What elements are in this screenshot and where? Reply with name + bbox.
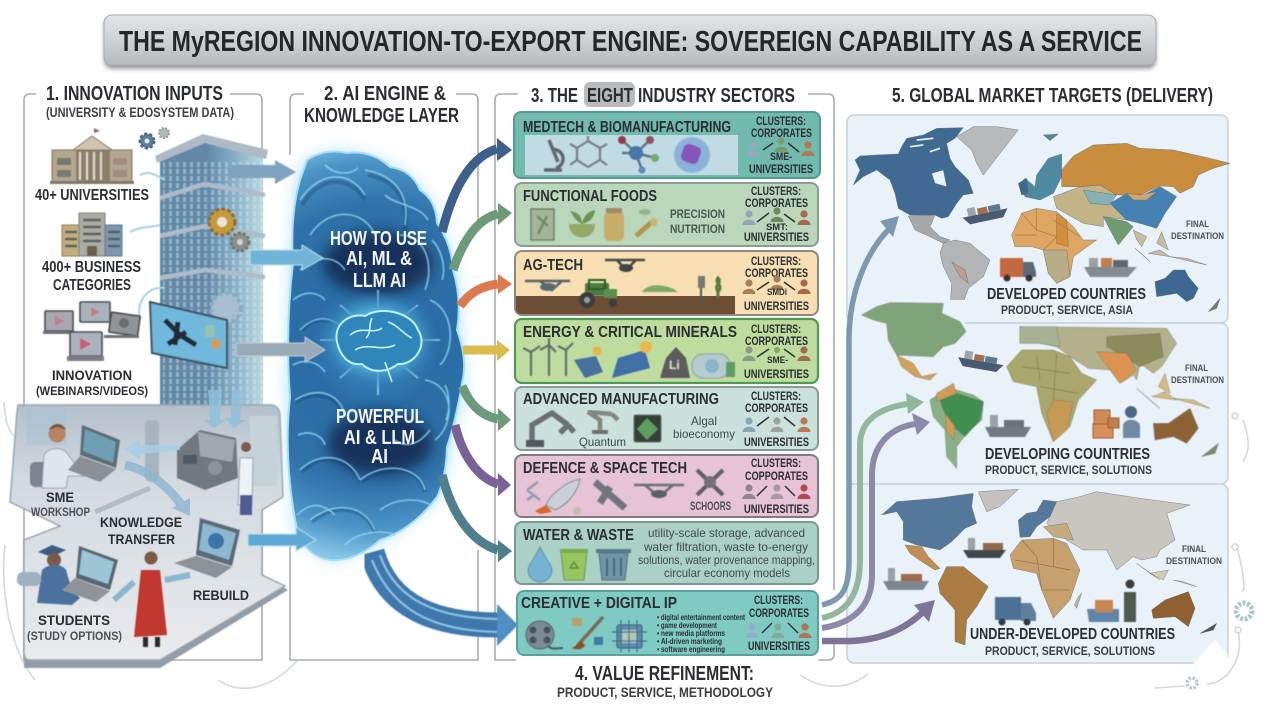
label: developed countries <box>987 286 1146 317</box>
sector card: defence and space tech <box>515 455 818 517</box>
label: rebuild: REBUILD <box>193 587 249 603</box>
cluster diagram: CORPORATES <box>745 196 808 210</box>
cluster diagram <box>746 593 812 653</box>
arrow to ag-tech <box>460 274 512 306</box>
label: value refinement: 4. VALUE REFINEMENT: <box>575 663 754 685</box>
icons: turbines, solar, lithium, tanker <box>523 338 735 378</box>
label: algal bioeconomy <box>673 414 735 441</box>
cluster diagram: SME- <box>770 151 792 163</box>
arrow to defence <box>455 425 511 496</box>
label: algal bioeconomy: bioeconomy <box>673 427 735 441</box>
icon: university building <box>50 128 134 184</box>
world map: under-developed <box>882 489 1217 645</box>
icon: gear right margin <box>1236 603 1252 619</box>
text: water solutions description: solutions, water provenance mapping, <box>638 553 815 567</box>
arrow to developing countries <box>822 393 924 618</box>
label: students study options: (STUDY OPTIONS) <box>27 629 122 643</box>
label: under-developed countries: PRODUCT, SERVICE, SOLUTIONS <box>985 644 1155 658</box>
title banner <box>104 15 1156 69</box>
icon: delivery truck <box>1000 258 1036 282</box>
cluster diagram: UNIVERSITIES <box>744 299 809 313</box>
label: final destination: DESTINATION <box>1166 556 1222 566</box>
platform shape <box>10 405 288 668</box>
decorative flow lines <box>4 402 1248 688</box>
icon: crates and worker <box>1087 580 1136 622</box>
panel: developed countries map <box>847 115 1230 323</box>
icon: rebuild laptop <box>174 518 240 578</box>
sector card: functional foods: FUNCTIONAL FOODS <box>523 188 657 205</box>
icons: microscope and molecules <box>544 136 710 174</box>
icon: lab machine and scientist <box>145 420 253 515</box>
cluster diagram: CORPORATES <box>751 126 812 140</box>
panel: innovation inputs <box>24 83 268 660</box>
label: developing countries: DEVELOPING COUNTRIES <box>985 446 1150 463</box>
sector card: medtech <box>514 112 820 178</box>
label: SME workshop <box>31 489 90 519</box>
icons: water drop, recycling bin, bin <box>528 547 631 582</box>
label: precision nutrition: NUTRITION <box>670 222 725 236</box>
icons: rocket, satellite, drones <box>527 470 723 515</box>
cluster diagram: CORPORATES <box>745 401 808 415</box>
sector card: defence and space tech: DEFENCE & SPACE TECH <box>523 460 687 477</box>
label: precision nutrition: PRECISION <box>670 207 725 221</box>
arrows: brain to sectors <box>372 138 518 646</box>
cluster diagram: CORPORATES <box>745 334 808 348</box>
brain label: how to use AI: AI, ML & <box>346 248 412 270</box>
cluster diagram: CORPORATES <box>745 266 808 280</box>
sector card: creative and digital IP <box>517 591 818 655</box>
label: 40+ universities: 40+ UNIVERSITIES <box>35 187 149 204</box>
heading: innovation inputs: 1. INNOVATION INPUTS <box>46 83 223 105</box>
text: water solutions description: water filtration, waste to-energy <box>643 540 808 554</box>
arrows: lab flow <box>95 390 246 516</box>
brain glow <box>290 153 462 560</box>
cluster diagram: CLUSTERS: <box>751 254 801 268</box>
cluster diagram: UNIVERSITIES <box>749 162 813 176</box>
label: under-developed countries: UNDER-DEVELOPED COUNTRIES <box>970 626 1175 643</box>
sector card: medtech: MEDTECH & BIOMANUFACTURING <box>523 119 731 136</box>
label: knowledge transfer <box>100 514 182 547</box>
cluster diagram: CLUSTERS: <box>751 456 801 470</box>
arrows: tower to brain <box>228 160 325 551</box>
label: final destination <box>1171 219 1224 241</box>
sector card: water and waste: WATER & WASTE <box>523 527 634 544</box>
label: precision nutrition <box>670 207 725 236</box>
cluster diagram: UNIVERSITIES <box>744 367 809 381</box>
cluster diagram: UNIVERSITIES <box>744 230 809 244</box>
icon: cargo ship <box>961 200 1009 226</box>
list: creative capabilities: • digital entertainment content <box>657 613 745 622</box>
arrow to developed countries <box>822 216 899 605</box>
arrows: export routes to markets <box>822 216 935 641</box>
cluster diagram <box>742 254 810 313</box>
label: knowledge transfer: TRANSFER <box>108 531 175 547</box>
dark text halos <box>323 231 433 475</box>
cluster diagram: SMT: <box>766 222 788 232</box>
label: final destination <box>1171 363 1224 385</box>
sector card: creative and digital IP: CREATIVE + DIGITAL IP <box>521 595 677 612</box>
sector card: energy and critical minerals: ENERGY & CRITICAL MINERALS <box>523 324 737 341</box>
icon: office building <box>62 213 122 256</box>
cluster diagram: SMDi <box>767 287 787 297</box>
icon: central glowing brain <box>316 290 440 390</box>
heading: AI engine: KNOWLEDGE LAYER <box>304 105 459 127</box>
arrow to energy <box>463 340 510 361</box>
cluster diagram: CORPORATES <box>749 606 809 620</box>
cluster diagram: CLUSTERS: <box>756 114 806 128</box>
brain: large blue brain <box>288 152 464 560</box>
sector card: ag-tech <box>515 251 818 315</box>
icon: caped figure <box>114 552 190 647</box>
label: developing countries: PRODUCT, SERVICE, SOLUTIONS <box>985 463 1152 477</box>
arrow to water <box>442 475 512 562</box>
icons: drones, tractor, sensor <box>525 260 720 308</box>
icons: robot arms and chip <box>526 412 661 447</box>
cluster diagram: CLUSTERS: <box>751 389 801 403</box>
label: final destination: FINAL <box>1185 363 1208 373</box>
label: 400+ business categories: CATEGORIES <box>53 277 131 294</box>
label: final destination: DESTINATION <box>1171 231 1224 241</box>
arrow to medtech <box>442 138 512 232</box>
arrow to advanced manufacturing <box>462 386 511 431</box>
icon: gear bottom right <box>1187 678 1197 688</box>
list: creative capabilities: • new media platforms <box>657 629 725 638</box>
text: water solutions description: circular economy models <box>664 566 790 580</box>
label: SME workshop: SME <box>46 489 74 505</box>
arrow to developing countries two <box>822 413 930 628</box>
panel: developing countries map <box>847 300 1228 484</box>
icon: data tower <box>130 134 268 420</box>
icons: turbines, solar, lithium, tanker: Li <box>669 358 680 372</box>
label: schoors: SCHOORS <box>690 499 731 513</box>
cluster diagram: CLUSTERS: <box>751 184 801 198</box>
label: final destination <box>1166 544 1222 566</box>
cluster diagram <box>742 456 810 516</box>
sector card: functional foods <box>515 183 818 246</box>
cluster diagram: COPPORATES <box>745 469 808 483</box>
cluster diagram: CLUSTERS: <box>751 322 801 336</box>
label: developed countries: DEVELOPED COUNTRIES <box>987 286 1146 303</box>
cluster diagram <box>742 389 810 449</box>
icon: graduate student <box>17 545 118 605</box>
panel: workshop platform <box>10 390 288 668</box>
icon: SME at laptop <box>30 424 120 488</box>
arrow to functional foods <box>453 203 512 270</box>
label: final destination: FINAL <box>1182 544 1206 554</box>
icons: food products <box>531 208 658 241</box>
list: creative capabilities <box>657 613 745 654</box>
cluster diagram: UNIVERSITIES <box>744 435 809 449</box>
label: students study options <box>27 612 122 643</box>
brain label: how to use AI: LLM AI <box>353 270 406 292</box>
icon: container ship <box>985 415 1031 437</box>
label: 400+ business categories <box>42 259 141 294</box>
sector card: water and waste <box>515 522 818 584</box>
world map: developed <box>853 127 1230 322</box>
icon: container ship left <box>883 568 929 590</box>
icon: cargo ship <box>963 538 1006 558</box>
heading: eight industry sectors: EIGHT <box>587 85 633 107</box>
icon: cargo ship <box>957 349 1005 373</box>
text: water solutions description: utility-scale storage, advanced <box>648 526 805 540</box>
brain label: powerful AI: AI <box>371 446 388 468</box>
cluster diagram: CLUSTERS: <box>754 593 803 607</box>
icon: curved video screen <box>150 302 227 368</box>
label: knowledge transfer: KNOWLEDGE <box>100 514 182 530</box>
cluster diagram: UNIVERSITIES <box>748 639 810 653</box>
label: under-developed countries <box>970 626 1175 658</box>
cluster diagram <box>742 322 810 381</box>
panel: AI engine and knowledge layer <box>288 83 478 660</box>
sector card: advanced manufacturing <box>515 387 818 450</box>
label: SME workshop: WORKSHOP <box>31 505 90 519</box>
label: students study options: STUDENTS <box>38 612 110 628</box>
sector card: energy and critical minerals <box>515 319 818 383</box>
list: creative capabilities: • software engineering <box>657 645 725 654</box>
label: final destination: DESTINATION <box>1171 375 1224 385</box>
brain label: powerful AI <box>336 406 424 468</box>
icon: webinar laptops <box>43 302 140 361</box>
label: quantum: Quantum <box>579 435 626 449</box>
label: algal bioeconomy: Algal <box>691 414 717 428</box>
panel: under-developed countries map <box>847 484 1228 664</box>
subheading: (UNIVERSITY & EDOSYSTEM DATA) <box>46 104 234 120</box>
heading: eight industry sectors: 3. THE <box>531 85 578 107</box>
label: innovation webinars and videos <box>36 367 148 398</box>
heading: eight industry sectors: INDUSTRY SECTORS <box>638 85 795 107</box>
icon: blue truck <box>995 597 1036 626</box>
panel: eight industry sectors <box>495 82 834 660</box>
cluster diagram <box>742 184 810 244</box>
label: value refinement <box>557 663 774 700</box>
label: final destination: FINAL <box>1186 219 1209 229</box>
cluster diagram: SME- <box>767 355 788 365</box>
label: innovation webinars and videos: (WEBINARS/VIDEOS) <box>36 384 148 398</box>
list: creative capabilities: • AI-driven marketing <box>657 637 722 646</box>
label: 400+ business categories: 400+ BUSINESS <box>42 259 141 276</box>
icon: container ship <box>1084 258 1137 277</box>
label: innovation webinars and videos: INNOVATION <box>52 367 132 383</box>
text: water solutions description <box>638 526 815 580</box>
brain label: how to use AI: HOW TO USE <box>330 228 427 250</box>
icons: film reel, paintbrush, chip <box>526 617 647 652</box>
brain label: powerful AI: AI & LLM <box>344 427 415 449</box>
arrow to creative <box>372 552 518 646</box>
heading: eight industry sectors <box>531 82 795 107</box>
label: developing countries <box>985 446 1152 477</box>
label: value refinement: PRODUCT, SERVICE, METHODOLOGY <box>557 684 774 700</box>
icon: small gears <box>140 128 169 148</box>
world map: developing <box>862 303 1218 468</box>
cluster diagram: UNIVERSITIES <box>744 502 809 516</box>
icon: crates and worker <box>1093 406 1140 438</box>
icon: white cloud overlay <box>1193 640 1228 664</box>
arrow to under-developed countries <box>822 600 935 641</box>
list: creative capabilities: • game development <box>657 621 717 630</box>
cluster diagram <box>746 114 814 176</box>
sector card: advanced manufacturing: ADVANCED MANUFACTURING <box>523 391 719 408</box>
label: developed countries: PRODUCT, SERVICE, ASIA <box>1001 303 1133 317</box>
heading: AI engine: 2. AI ENGINE & <box>324 83 446 105</box>
sector card: ag-tech: AG-TECH <box>523 257 583 274</box>
brain label: how to use AI <box>330 228 427 292</box>
brain label: powerful AI: POWERFUL <box>336 406 424 428</box>
heading: AI engine <box>304 83 459 127</box>
